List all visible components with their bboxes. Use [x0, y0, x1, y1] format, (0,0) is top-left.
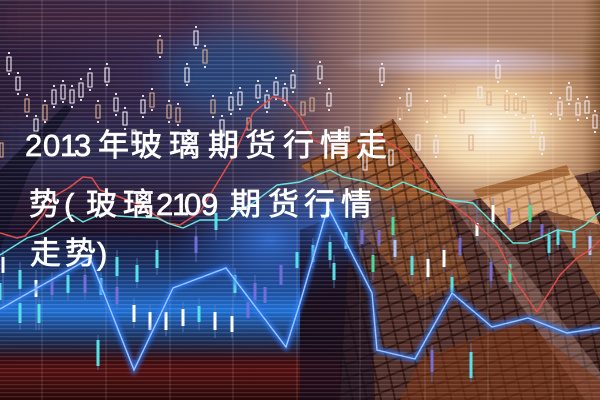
title: three lines of white text	[25, 128, 387, 271]
chart: upper outlined candlesticks	[0, 26, 597, 180]
line: glowing blue trend	[0, 207, 600, 370]
title line 3: 走势)	[30, 236, 107, 271]
title line 1: 2013年玻璃期货行情走	[25, 128, 387, 163]
line: red trend	[0, 97, 600, 312]
title line 2: 势(玻璃2109期货行情	[29, 187, 372, 222]
buildings with window grids	[0, 105, 600, 400]
line: teal trend	[0, 170, 600, 255]
chart: lower filled candlesticks	[0, 198, 590, 382]
